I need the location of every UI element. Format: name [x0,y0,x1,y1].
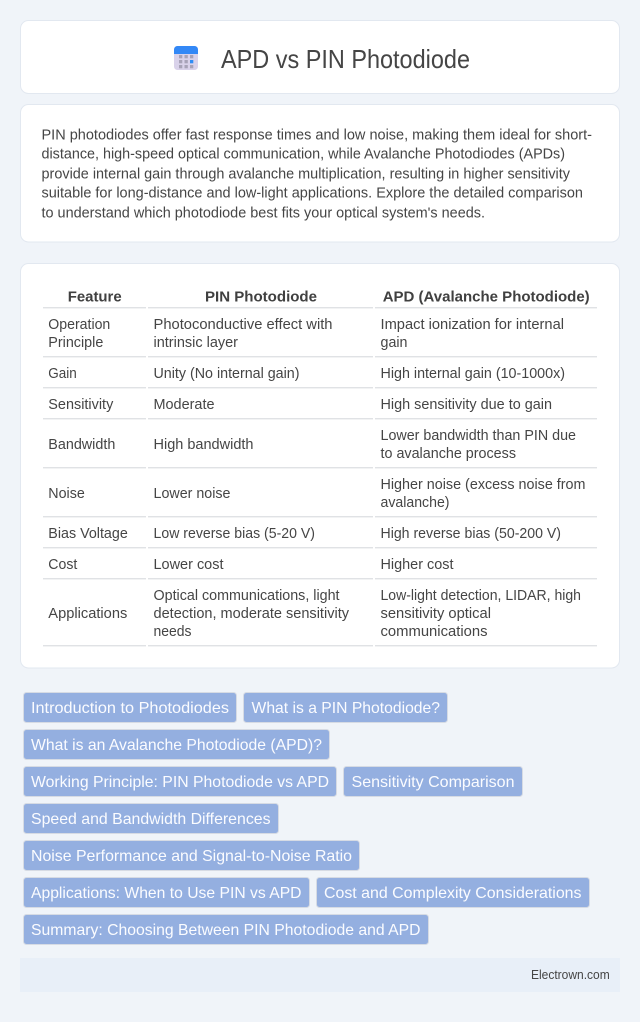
tag: introduction [24,692,236,722]
row: noise [48,477,586,511]
table header row: Feature [68,289,122,306]
row: applications: needs [154,624,192,640]
row: operation principle: intrinsic layer [154,335,238,351]
intro text block: PIN photodiodes offer fast response times and low noise, making them ideal for short- [42,126,592,143]
panel: topic tags [24,692,590,944]
tag: sensitivity [344,766,522,796]
intro text block: suitable for long-distance and low-light applications. Explore the detailed comparison [42,185,583,202]
row: sensitivity [48,397,552,413]
row: applications [48,588,581,640]
row: gain: High internal gain (10-1000x) [380,366,565,382]
row: cost [48,557,454,573]
row: gain [48,366,565,382]
tag: working principle [24,766,336,796]
row: gain: Unity (No internal gain) [154,366,300,382]
row: operation principle: Principle [48,335,103,351]
panel: introduction [20,104,620,242]
tag: summary [24,914,428,944]
intro text block: provide internal gain through avalanche multiplication, resulting in higher sensitivity [42,165,570,182]
row: operation principle: Operation [48,317,110,333]
row: operation principle [48,317,564,351]
tag: speed and bandwidth: Speed and Bandwidth Differences [31,811,270,828]
row: cost: Lower cost [154,557,224,573]
tag: applications [24,878,310,908]
tag: sensitivity: Sensitivity Comparison [352,774,514,791]
row: bandwidth [48,428,576,462]
row: applications: detection, moderate sensitivity [154,606,350,622]
footer: Electrown.com [531,967,610,982]
row: noise: Noise [48,486,85,502]
tag: summary: Summary: Choosing Between PIN Photodiode and APD [31,922,420,939]
row: applications: Low-light detection, LIDAR, high [380,588,581,604]
intro text block: distance, high-speed optical communication, while Avalanche Photodiodes (APDs) [42,146,565,163]
tag: noise performance [24,840,360,870]
row: applications: Optical communications, light [154,588,340,604]
footer [20,958,620,992]
row: gain: Gain [48,366,77,382]
row: applications: Applications [48,606,127,622]
intro text block: to understand which photodiode best fits your optical system's needs. [42,204,485,221]
tag: what is PIN: What is a PIN Photodiode? [252,700,440,717]
row: bandwidth: Bandwidth [48,437,115,453]
row: applications: sensitivity optical [380,606,491,622]
tag: working principle: Working Principle: PIN Photodiode vs APD [31,774,329,791]
panel: comparison table [20,264,620,668]
row: sensitivity: High sensitivity due to gain [380,397,552,413]
row: operation principle: gain [380,335,408,351]
tag: cost and complexity [316,878,590,908]
row: bias voltage: Bias Voltage [48,526,128,542]
tag: introduction: Introduction to Photodiodes [31,700,229,717]
title: APD vs PIN Photodiode [221,46,470,74]
tag: speed and bandwidth [24,804,278,834]
table header row [68,289,590,306]
row: sensitivity: Moderate [154,397,214,413]
tag: what is APD: What is an Avalanche Photodiode (APD)? [31,737,322,754]
intro text block [42,126,592,221]
row: cost: Higher cost [380,557,454,573]
row: bias voltage [48,526,561,542]
row: bandwidth: Lower bandwidth than PIN due [380,428,576,444]
row: sensitivity: Sensitivity [48,397,114,413]
tag: noise performance: Noise Performance and Signal-to-Noise Ratio [31,848,352,865]
row: cost: Cost [48,557,77,573]
tag: cost and complexity: Cost and Complexity Considerations [324,885,582,902]
panel: title header [20,20,620,94]
row: bandwidth: High bandwidth [154,437,254,453]
row: applications: communications [380,624,488,640]
row: operation principle: Impact ionization for internal [380,317,564,333]
row: noise: Higher noise (excess noise from [380,477,586,493]
row: noise: Lower noise [154,486,230,502]
row: bandwidth: to avalanche process [380,446,516,462]
tag: applications: Applications: When to Use PIN vs APD [31,885,302,902]
row: operation principle: Photoconductive effect with [154,317,332,333]
tag: what is APD [24,730,330,760]
table header row: PIN Photodiode [205,289,317,306]
tag: what is PIN [244,692,448,722]
row: bias voltage: Low reverse bias (5-20 V) [154,526,315,542]
icon: calendar grid [174,46,198,70]
row: noise: avalanche) [380,495,450,511]
table header row: APD (Avalanche Photodiode) [383,289,590,306]
row: bias voltage: High reverse bias (50-200 V) [380,526,561,542]
